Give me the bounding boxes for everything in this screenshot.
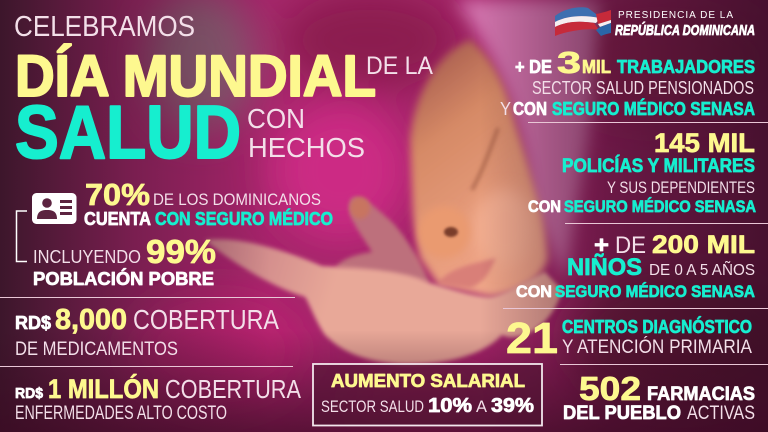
text: con: CON <box>528 197 561 216</box>
text: cobertura: COBERTURA <box>133 304 279 335</box>
text: trabajadores: TRABAJADORES <box>617 57 755 77</box>
logo: presidencia <box>555 7 755 39</box>
baby fingertip <box>350 197 370 219</box>
callout heading: AUMENTO SALARIAL <box>331 371 525 391</box>
callout text: a: A <box>476 397 488 416</box>
callout: aumento salarial <box>313 364 542 426</box>
bracket line <box>16 211 27 262</box>
baby forehead and face <box>410 40 548 297</box>
text: farmacias: FARMACIAS <box>647 384 755 405</box>
panel: police and military <box>528 128 756 216</box>
icon: flag ribbon <box>555 7 611 36</box>
text: de los dominicanos: DE LOS DOMINICANOS <box>153 190 321 209</box>
stat: 8,000: 8,000 <box>55 304 127 336</box>
panel: health workers <box>500 45 755 119</box>
stat: 70 percent: 70% <box>85 177 150 212</box>
stat: 502: 502 <box>579 370 641 407</box>
currency label: RD$ <box>15 385 44 402</box>
text: + de: + DE <box>515 57 552 77</box>
logo text: presidencia de la: PRESIDENCIA DE LA <box>618 10 733 21</box>
callout stat: 39 percent: 39% <box>491 395 534 417</box>
panel: pharmacies <box>563 370 755 424</box>
callout text: sector salud: SECTOR SALUD <box>321 397 424 416</box>
panel: medicines coverage <box>15 304 279 360</box>
stat: 99 percent: 99% <box>146 233 216 270</box>
title: con: CON <box>247 103 305 134</box>
text: cobertura: COBERTURA <box>165 374 302 404</box>
stat: 1 millón: 1 MILLÓN <box>48 373 159 404</box>
stat: 21: 21 <box>506 314 558 363</box>
title: de la: DE LA <box>366 52 433 80</box>
panel: high cost illness coverage <box>15 373 302 424</box>
text: de medicamentos: DE MEDICAMENTOS <box>15 339 178 360</box>
text: y: Y <box>500 99 511 119</box>
text: con seguro médico: CON SEGURO MÉDICO <box>155 208 333 229</box>
currency label: RD$ <box>15 313 51 333</box>
text: incluyendo: INCLUYENDO <box>33 247 141 267</box>
panel: children <box>516 231 755 301</box>
text: plus: + <box>594 232 609 259</box>
title: salud: SALUD <box>15 90 241 174</box>
baby cheek <box>473 190 537 266</box>
eye crease <box>472 128 498 190</box>
text: y atención primaria: Y ATENCIÓN PRIMARIA <box>562 336 752 358</box>
stat: 145 mil: 145 MIL <box>654 128 755 158</box>
stat: 3: 3 <box>557 45 581 80</box>
dark side overlays <box>0 0 270 432</box>
baby mouth <box>438 258 496 288</box>
text: con: CON <box>516 282 552 301</box>
text: de: DE <box>615 232 646 259</box>
text: activas: ACTIVAS <box>687 403 755 424</box>
text: niños: NIÑOS <box>567 253 642 281</box>
title: hechos: HECHOS <box>248 132 365 163</box>
stat: mil: MIL <box>582 57 611 77</box>
text: enfermedades alto costo: ENFERMEDADES ALTO COSTO <box>15 403 227 424</box>
baby fingers <box>335 197 430 284</box>
text: población pobre: POBLACIÓN POBRE <box>33 268 214 289</box>
text: de 0 a 5 años: DE 0 A 5 AÑOS <box>649 259 755 279</box>
stat: 200 mil: 200 MIL <box>652 231 755 259</box>
title: día mundial: DÍA MUNDIAL <box>15 44 376 109</box>
text: cuenta: CUENTA <box>84 209 151 229</box>
title: celebramos: CELEBRAMOS <box>14 11 195 43</box>
callout stat: 10 percent: 10% <box>428 395 472 417</box>
icon: id card <box>32 193 76 224</box>
blanket fold <box>455 0 600 280</box>
baby hand and arm <box>205 239 562 364</box>
panel: insurance coverage <box>16 177 333 289</box>
panel: diagnostic centers <box>506 314 752 363</box>
baby nose <box>418 206 470 258</box>
title block <box>14 11 433 174</box>
text: del pueblo: DEL PUEBLO <box>563 403 681 424</box>
text: con: CON <box>513 99 547 119</box>
